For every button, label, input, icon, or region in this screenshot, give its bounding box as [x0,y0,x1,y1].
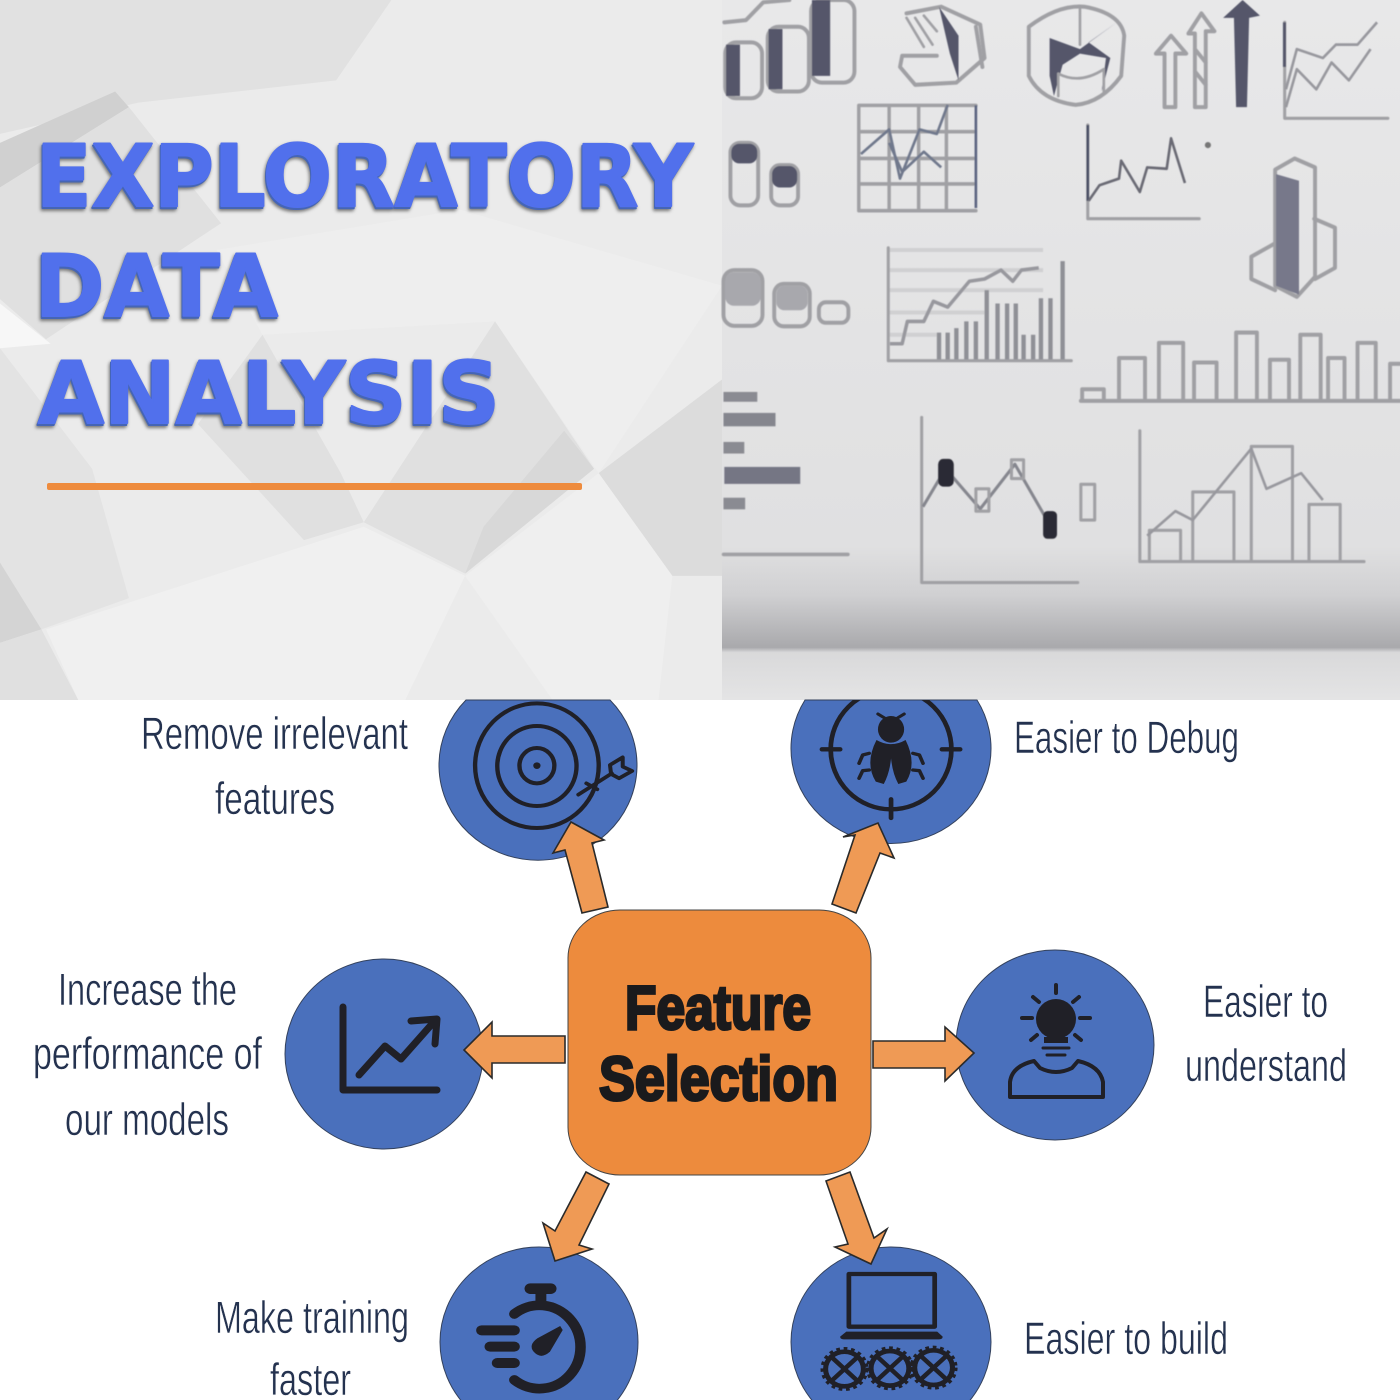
circle: performance [285,959,483,1149]
central box: feature selection [568,910,871,1175]
arrow: to training [543,1172,609,1261]
sketch: cylinder bars [724,0,854,98]
sketch: bar outline chart [1081,333,1400,401]
label: easier to build: Easier to build [1024,1313,1228,1364]
sketch: hatched cylinders [723,270,848,326]
title line: DATA: DATA [35,237,278,337]
icon: target with dart [475,703,632,828]
circle: training [440,1247,638,1400]
title line: ANALYSIS: ANALYSIS [38,344,500,444]
label: increase performance: our models [65,1094,229,1145]
panel: title background [0,0,722,700]
label: remove irrelevant features: features [215,773,335,824]
sketch: 3D bar [1251,158,1335,297]
panel: feature selection diagram [0,689,1400,1400]
icon: stopwatch [476,1283,581,1389]
arrow: to debug [832,823,894,913]
title line: EXPLORATORY: EXPLORATORY [36,127,695,227]
sketch: line chart centre [1086,125,1211,219]
label: easier to understand: Easier to [1203,976,1328,1027]
sketch: arrows [1156,0,1260,107]
label: remove irrelevant features: Remove irrelevant [141,708,408,759]
sketch: combo chart [888,248,1071,361]
sketch: line chart top right [1283,22,1388,118]
sketch: grid line chart [859,105,977,211]
orange divider under title [47,483,582,490]
circle: build [791,1247,991,1400]
label: increase performance [33,964,262,1145]
label: make training faster [215,1292,409,1400]
icon: bug in crosshair [822,689,960,818]
panel: hand-drawn charts photo [722,0,1400,700]
icon: laptop with gears [823,1274,955,1389]
sketch: candlestick chart [922,417,1095,583]
icon: rising line chart [343,1007,437,1090]
label: increase performance: performance of [33,1028,262,1079]
label: increase performance: Increase the [58,964,237,1015]
circle: debug [791,700,991,843]
sketch: area bars chart [1140,431,1364,562]
label: easier to debug: Easier to Debug [1014,712,1239,763]
sketch: text lines [723,392,848,554]
label: remove irrelevant features [141,708,408,824]
circle: understand [956,950,1154,1140]
sketch: small cylinders [730,143,798,205]
label: make training faster: Make training [215,1292,409,1343]
sketch: pie chart small [900,7,985,85]
arrow: to performance [464,1022,565,1078]
box heading line 2: Selection [599,1045,838,1114]
label: easier to understand [1185,976,1347,1091]
circle: target [439,700,637,860]
arrow: to understand [873,1027,974,1081]
arrow: to build [826,1172,887,1264]
arrow: to target [553,822,608,913]
sketch: pie chart large [1029,6,1124,105]
box heading line 1: Feature [625,974,811,1043]
icon: person with light bulb [1010,985,1103,1097]
title [35,127,695,444]
sketches of charts [723,0,1400,583]
